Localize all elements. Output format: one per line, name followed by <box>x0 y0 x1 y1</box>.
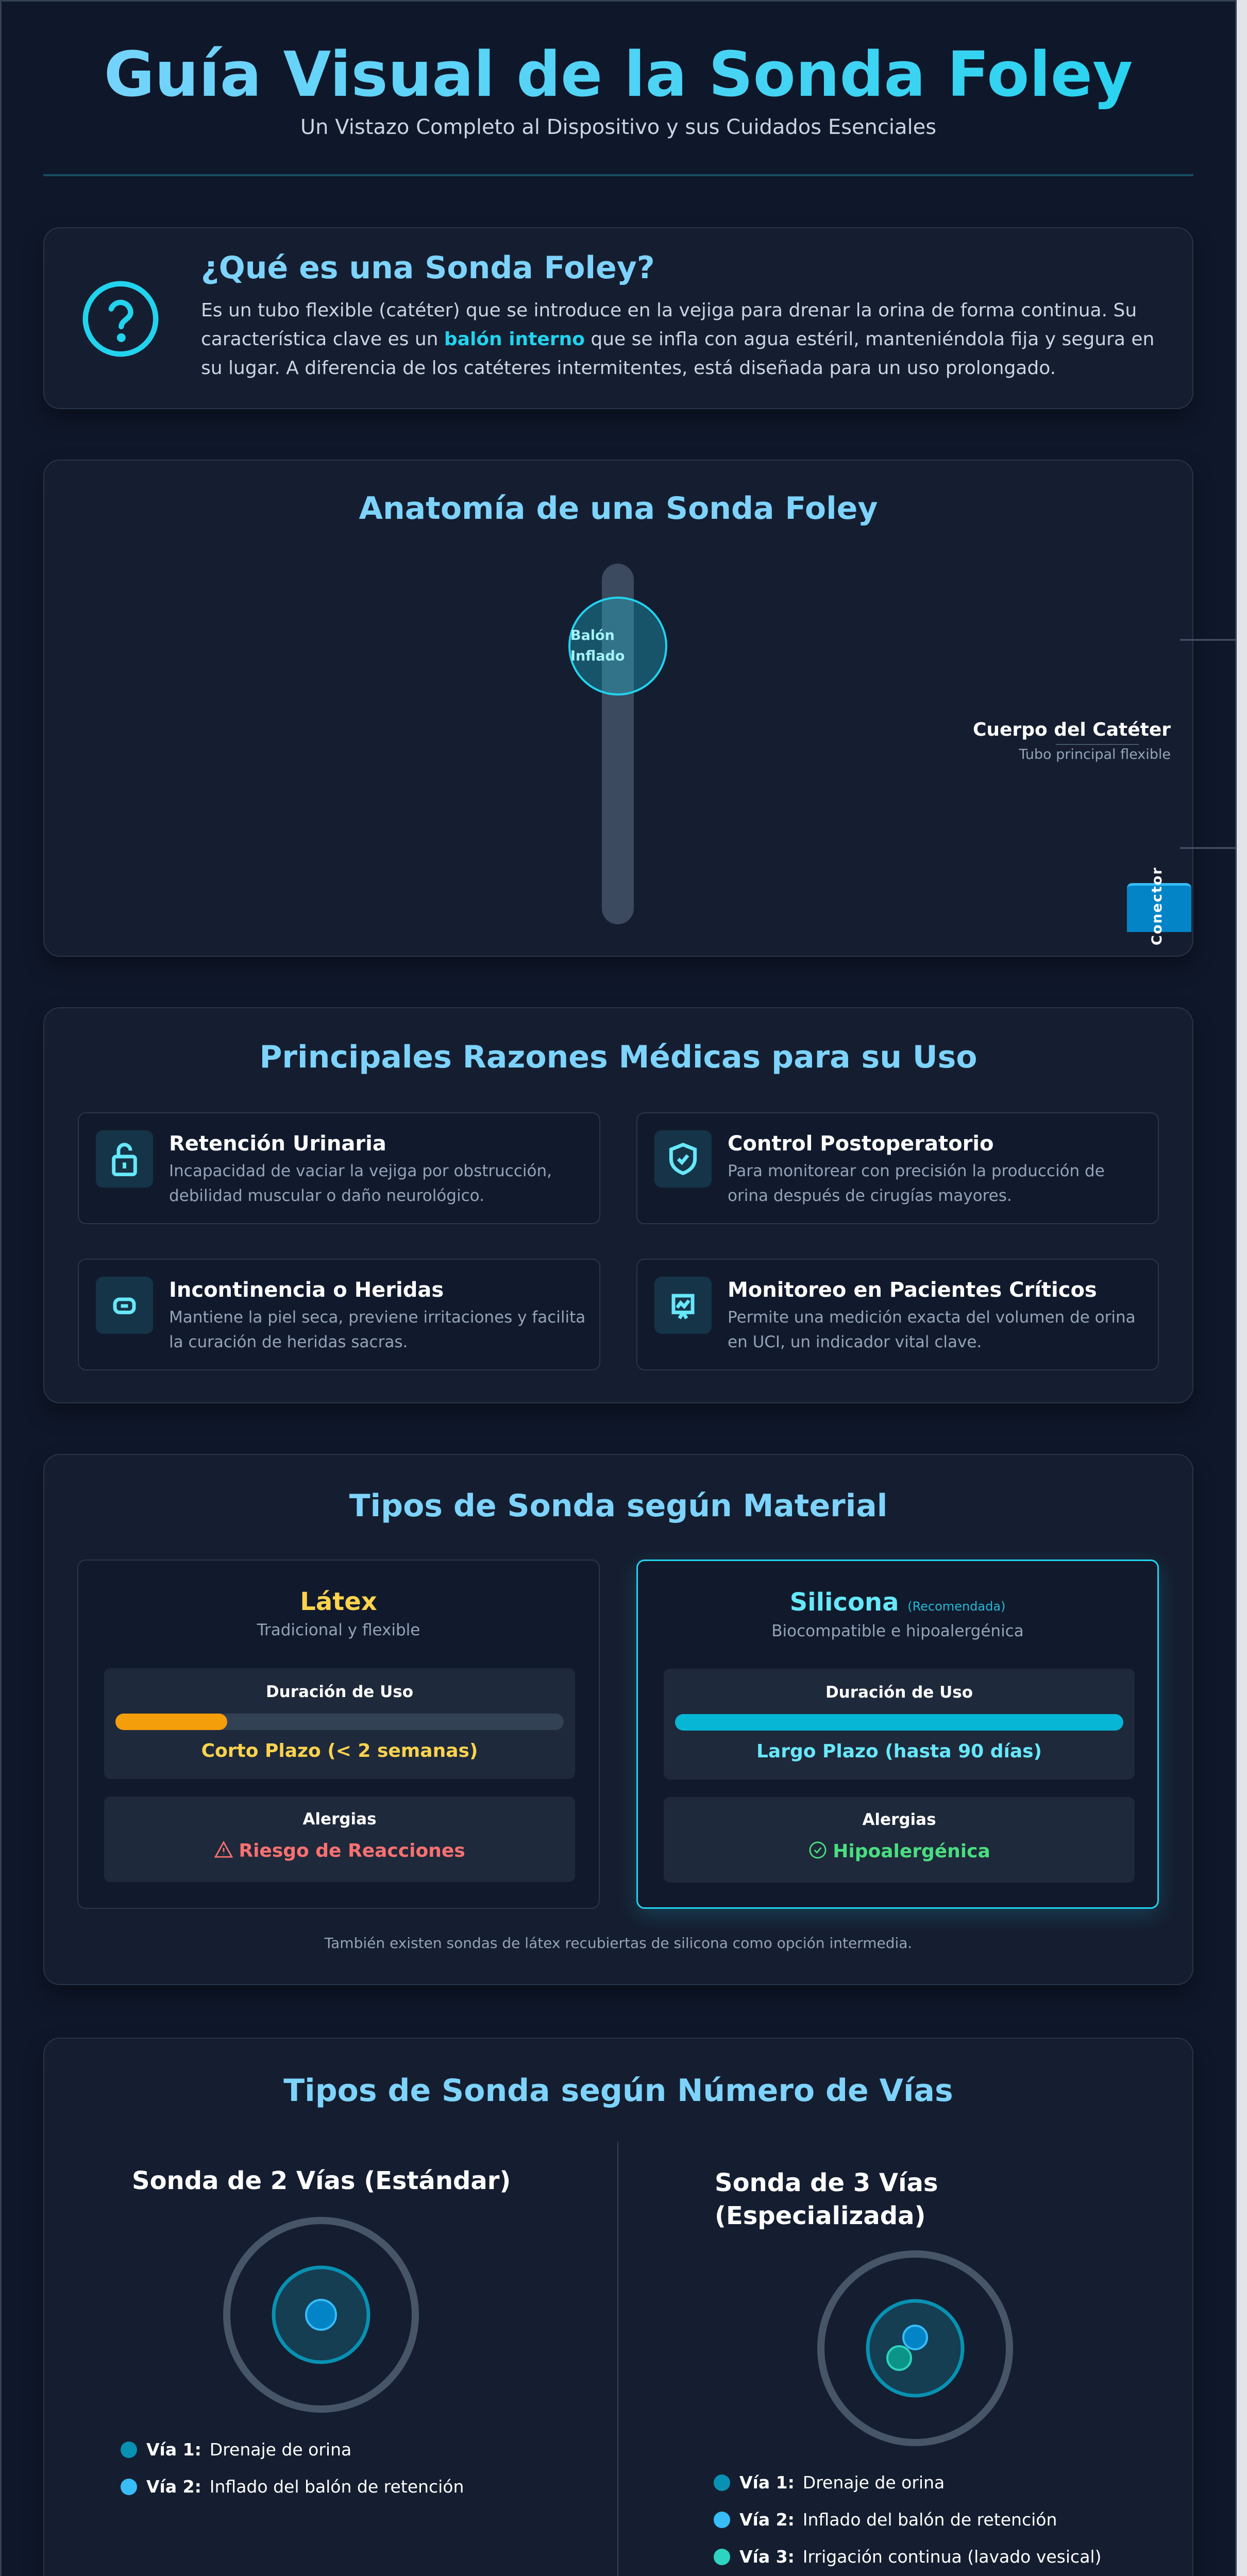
reason: retención <box>78 1112 600 1224</box>
balloon <box>569 598 666 694</box>
footnote: También existen sondas de látex recubiertas de silicona como opción intermedia. <box>325 1935 912 1952</box>
heading: Anatomía de una Sonda Foley <box>359 490 878 527</box>
material: silicona: Hipoalergénica <box>833 1841 990 1862</box>
balloon: Balón <box>570 628 615 643</box>
reason: incontinencia <box>78 1259 600 1370</box>
reason: postoperatorio: Control Postoperatorio <box>728 1132 993 1156</box>
material: silicona: Alergias <box>862 1810 936 1829</box>
legend: 3 vías <box>714 2472 1101 2567</box>
material: silicona: Largo Plazo (hasta 90 días) <box>756 1741 1042 1762</box>
heading: Principales Razones Médicas para su Uso <box>259 1039 978 1075</box>
legend: 2 vías <box>121 2439 464 2497</box>
title: Guía Visual de la Sonda Foley <box>104 39 1133 111</box>
material: silicona <box>636 1560 1159 1909</box>
connector <box>1127 883 1191 932</box>
material: látex: Corto Plazo (< 2 semanas) <box>201 1740 478 1761</box>
material: silicona: Biocompatible e hipoalergénica <box>771 1622 1024 1640</box>
text: Vía 3: Irrigación continua (lavado vesical) <box>739 2547 1101 2567</box>
material: silicona: Silicona (Recomendada) <box>790 1588 1005 1617</box>
panel: qué es <box>43 227 1193 409</box>
reason: incontinencia: Mantiene la piel seca, previene irritaciones y facilita la curación de heridas sacras. <box>169 1308 585 1351</box>
material: látex: Riesgo de Reacciones <box>239 1840 465 1861</box>
panel: vías <box>43 2038 1193 2576</box>
material: látex: Tradicional y flexible <box>257 1621 420 1639</box>
material: silicona: Duración de Uso <box>825 1683 973 1702</box>
reason: incontinencia: Incontinencia o Heridas <box>169 1278 444 1302</box>
material: látex: Duración de Uso <box>266 1683 413 1701</box>
heading: 3 vías: Sonda de 3 Vías <box>715 2168 938 2197</box>
text: Conector <box>1149 867 1165 945</box>
material: látex: Alergias <box>302 1810 377 1828</box>
material: látex <box>77 1560 600 1909</box>
reason: postoperatorio <box>636 1112 1159 1224</box>
callout: cuerpo: Cuerpo del Catéter <box>973 719 1171 740</box>
icon: 3-way cross section <box>817 2250 1013 2446</box>
panel: anatomía <box>43 460 1193 957</box>
heading: Tipos de Sonda según Material <box>349 1488 887 1524</box>
panel: razones <box>43 1007 1193 1403</box>
icon: question <box>82 281 159 357</box>
text: Vía 2: Inflado del balón de retención <box>146 2477 464 2497</box>
callout: cuerpo: Tubo principal flexible <box>1019 747 1171 762</box>
reason: retención: Incapacidad de vaciar la vejiga por obstrucción, debilidad muscular o daño neurológico. <box>169 1162 552 1205</box>
text: Vía 1: Drenaje de orina <box>146 2439 351 2460</box>
subtitle: Un Vistazo Completo al Dispositivo y sus Cuidados Esenciales <box>300 115 936 139</box>
reason: críticos: Permite una medición exacta del volumen de orina en UCI, un indicador vital clave. <box>728 1308 1136 1351</box>
icon: 2-way cross section <box>223 2217 419 2413</box>
tube <box>602 564 634 924</box>
heading: 3 vías: (Especializada) <box>715 2201 925 2230</box>
callout: cuerpo <box>973 719 1171 762</box>
reason: críticos <box>636 1259 1159 1370</box>
balloon: Inflado <box>570 648 625 664</box>
reason: críticos: Monitoreo en Pacientes Críticos <box>728 1278 1097 1302</box>
material: látex: Látex <box>300 1587 377 1616</box>
heading: 2 vías: Sonda de 2 Vías (Estándar) <box>132 2166 511 2195</box>
text: Vía 1: Drenaje de orina <box>739 2472 945 2493</box>
reason: postoperatorio: Para monitorear con precisión la producción de orina después de cirugías mayores. <box>728 1162 1105 1205</box>
reason: retención: Retención Urinaria <box>169 1132 386 1156</box>
text block: Es un tubo flexible (catéter) que se introduce en la vejiga para drenar la orina de forma continua. Su característica clave es un balón interno que se infla con agua estéril, manteniéndola fija y segura en su lugar. A diferencia de los catéteres intermitentes, está diseñada para un uso prolongado. <box>201 300 1154 379</box>
chart: catheter diagram <box>568 564 1236 924</box>
heading: ¿Qué es una Sonda Foley? <box>201 250 655 286</box>
panel: materiales <box>43 1454 1193 1985</box>
heading: Tipos de Sonda según Número de Vías <box>283 2073 953 2109</box>
heading: 3 vías <box>715 2168 938 2230</box>
text: Vía 2: Inflado del balón de retención <box>739 2510 1057 2530</box>
